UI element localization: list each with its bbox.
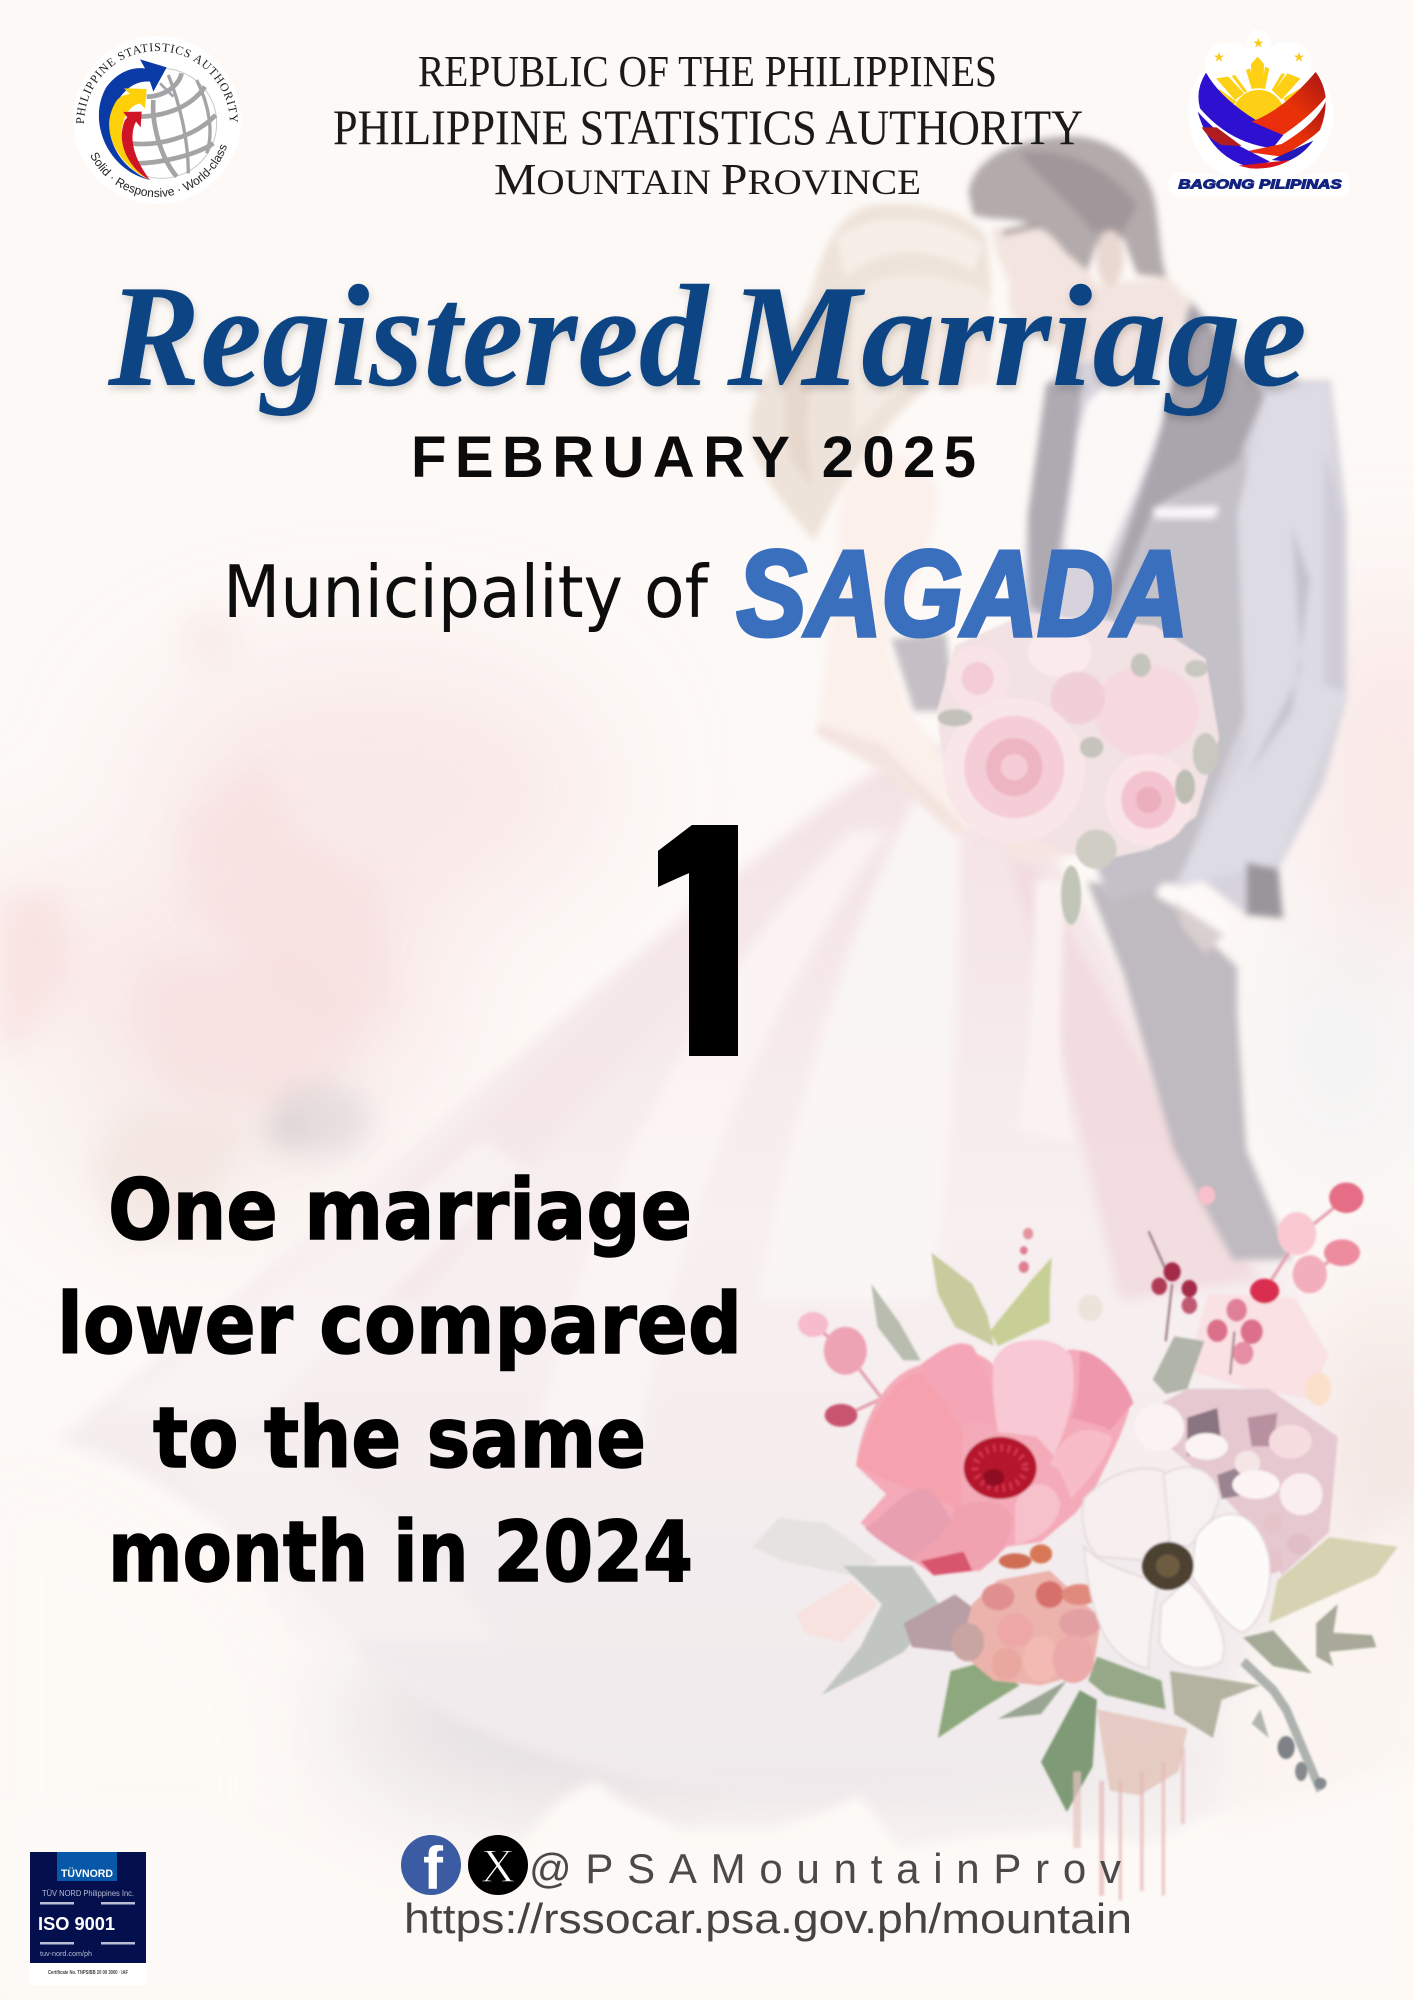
bodice — [891, 632, 955, 711]
footer: social and website — [401, 1835, 1132, 1942]
ear — [1096, 230, 1124, 286]
sticker outline — [1169, 30, 1350, 197]
hair — [969, 136, 1167, 278]
cuff and hand — [1155, 882, 1233, 935]
hem shadow — [1246, 862, 1283, 918]
icon: facebook: f — [423, 1835, 444, 1902]
wordmark: BAGONG PILIPINAS — [1178, 176, 1342, 191]
municipality line — [223, 525, 1188, 661]
icon: facebook — [401, 1835, 461, 1902]
neck and face — [991, 228, 1192, 396]
bride figure — [750, 204, 1073, 862]
header: agency names: REPUBLIC OF THE PHILIPPINES — [418, 47, 997, 96]
title: Registered — [107, 255, 710, 417]
icon: X: X — [481, 1840, 515, 1893]
municipality line: Municipality of — [223, 550, 710, 634]
header: agency names: PHILIPPINE STATISTICS AUTHORITY — [333, 99, 1083, 155]
held bouquet — [937, 613, 1219, 925]
seal text: PHILIPPINE STATISTICS AUTHORITY — [76, 43, 238, 124]
comparison statement: lower compared — [57, 1275, 742, 1373]
social handle: @PSAMountainProv — [529, 1845, 1121, 1892]
badge: ISO 9001 certification — [30, 1852, 146, 1985]
header logo: Philippine Statistics Authority seal: Solid · Responsive · World-class — [91, 144, 226, 198]
drips — [1097, 1709, 1187, 1795]
header logo: Philippine Statistics Authority seal — [73, 36, 241, 204]
badge: ISO 9001 certification: TÜVNORD — [61, 1867, 113, 1880]
groom figure — [969, 136, 1347, 1260]
comparison statement: to the same — [153, 1389, 646, 1487]
header: agency names: MOUNTAIN PROVINCE — [494, 155, 921, 204]
badge: ISO 9001 certification: Certificate No. TNPSIBB 20 00 3000 · IAF — [48, 1970, 128, 1976]
title — [107, 255, 1307, 417]
sun — [1216, 57, 1301, 122]
big pink flower — [856, 1341, 1131, 1575]
website: https://rssocar.psa.gov.ph/mountain — [404, 1895, 1132, 1942]
right pink wash and berries — [1187, 1293, 1329, 1399]
floral bouquet — [753, 1183, 1398, 1900]
header logo: Bagong Pilipinas — [1169, 30, 1350, 197]
comparison statement: month in 2024 — [108, 1503, 693, 1601]
stars: ★ — [1252, 36, 1264, 51]
illustration: bride and groom watercolor — [60, 136, 1347, 1798]
subtitle: month: FEBRUARY 2025 — [411, 425, 976, 490]
face — [928, 304, 991, 389]
wash fade at the bottom of the gown — [0, 1480, 1414, 2000]
jacket — [1019, 297, 1347, 918]
trousers — [1087, 882, 1292, 1260]
small coral flower — [959, 1571, 1101, 1685]
badge: ISO 9001 certification: tuv-nord.com/ph — [40, 1951, 92, 1958]
comparison statement: One marriage — [108, 1161, 692, 1259]
globe — [107, 68, 217, 178]
small white flower mass — [1136, 1389, 1338, 1575]
badge: ISO 9001 certification: ISO 9001 — [38, 1914, 115, 1934]
white flower — [1082, 1467, 1270, 1669]
hand — [969, 803, 1073, 862]
lapel — [1101, 301, 1265, 619]
header logo: Bagong Pilipinas: ★ — [1293, 50, 1305, 65]
shirt — [1064, 301, 1192, 573]
hair — [750, 204, 991, 540]
ribbon — [1018, 880, 1072, 1140]
header: agency names — [333, 47, 1083, 204]
background: watercolor washes — [0, 590, 1414, 1820]
icon: X — [468, 1835, 528, 1895]
arrows — [99, 59, 167, 180]
bride's gown — [60, 740, 1319, 1798]
comparison statement — [57, 1161, 742, 1601]
title: Marriage — [727, 255, 1307, 417]
shoulder and arm — [818, 456, 982, 829]
key number: 1 — [607, 753, 793, 1127]
pocket square — [1153, 506, 1219, 518]
bands — [1198, 73, 1283, 148]
foliage behind flowers — [753, 1518, 878, 1575]
badge: ISO 9001 certification: TÜV NORD Philippines Inc. — [42, 1889, 134, 1898]
header logo: Bagong Pilipinas: ★ — [1213, 50, 1225, 65]
municipality name: SAGADA — [737, 525, 1188, 661]
